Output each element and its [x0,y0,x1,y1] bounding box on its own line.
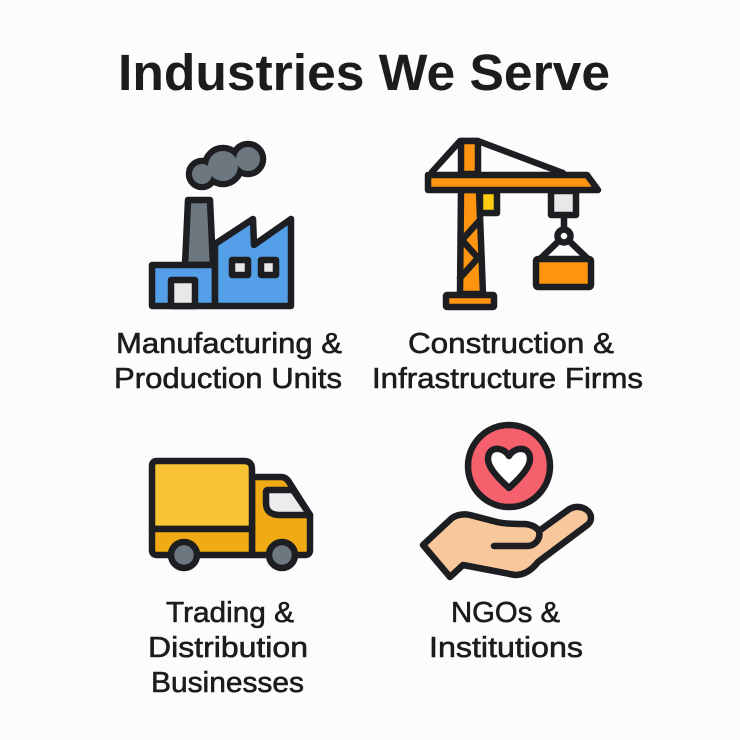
label: trading [148,597,308,699]
label: construction: Construction & [408,328,614,360]
label: NGOs: Institutions [429,632,583,664]
label: trading: Distribution [148,632,308,664]
icon: construction crane [428,141,598,307]
label: manufacturing: Production Units [114,363,342,395]
label: trading: Trading & [166,597,294,629]
label: manufacturing [114,328,342,395]
label: manufacturing: Manufacturing & [116,328,342,360]
icon: hand holding heart [423,425,591,577]
label: construction [372,328,643,395]
label: construction: Infrastructure Firms [372,363,643,395]
icon: factory [152,144,291,306]
label: trading: Businesses [151,667,304,699]
label: NGOs [429,597,583,664]
label: NGOs: NGOs & [451,597,560,629]
title: Industries We Serve [118,44,610,101]
icon: delivery truck [152,461,310,568]
